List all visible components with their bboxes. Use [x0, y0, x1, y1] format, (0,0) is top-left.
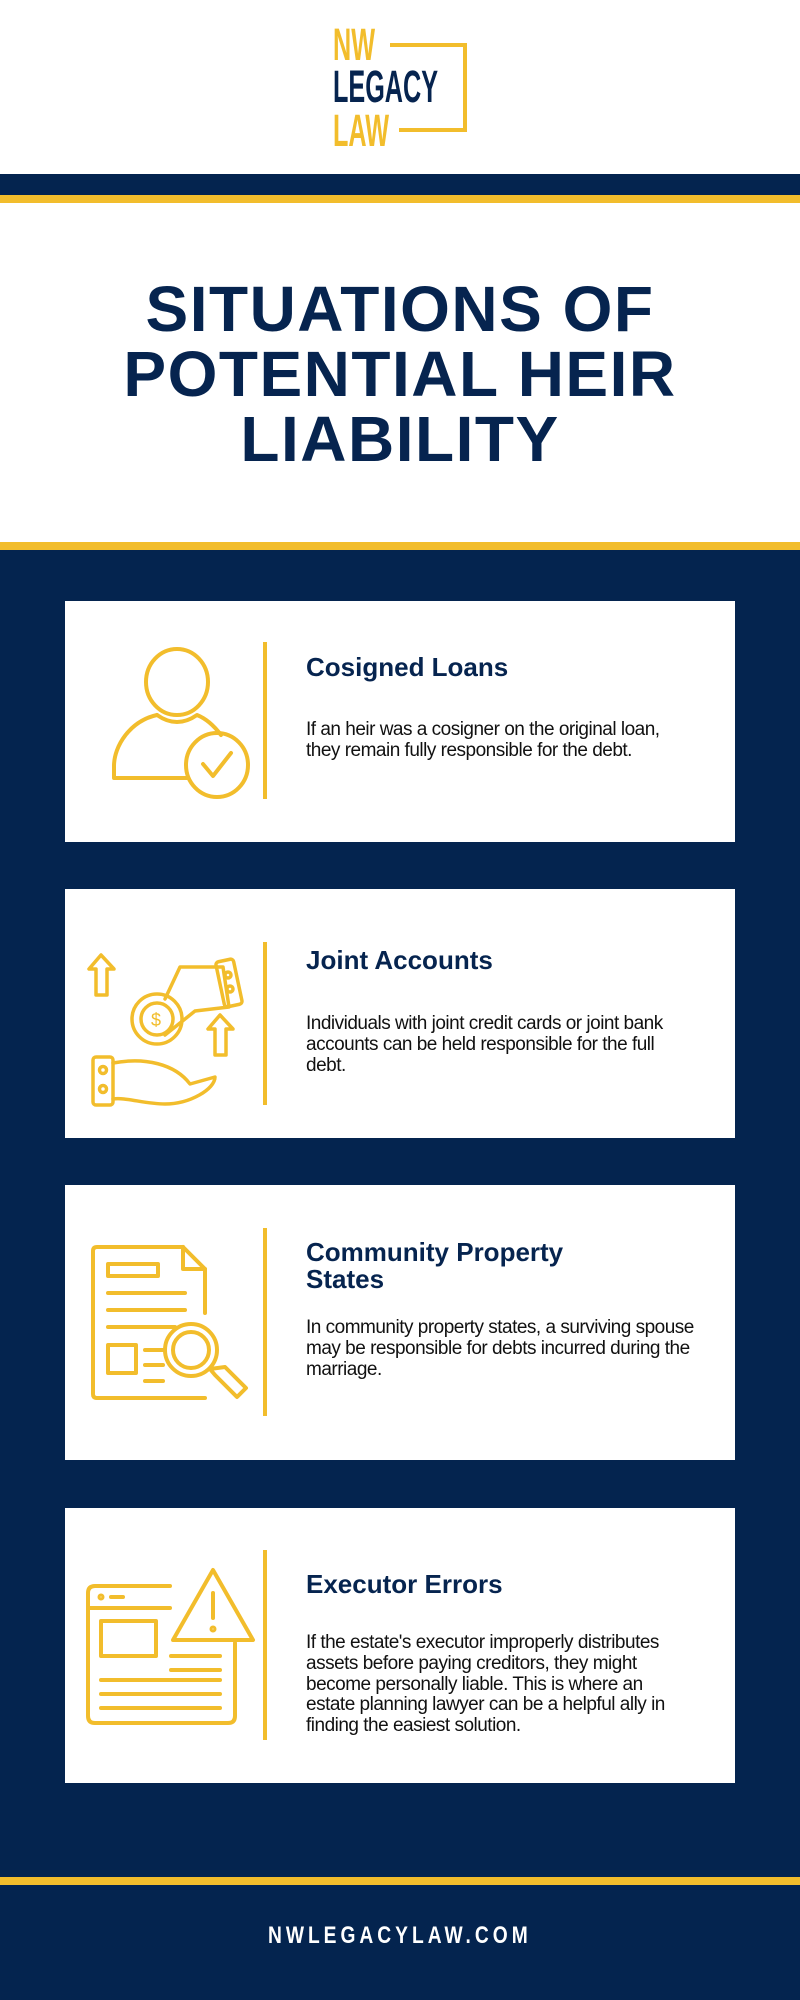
- logo bracket: [390, 43, 467, 132]
- text: In community property states, a surviving spouse may be responsible for debts incurred during the marriage.: [306, 1317, 694, 1380]
- heading: Executor Errors: [306, 1569, 503, 1599]
- text: Individuals with joint credit cards or joint bank accounts can be held responsible for the full debt.: [306, 1013, 663, 1076]
- icon: hands exchanging money: $: [151, 1010, 161, 1030]
- title: LIABILITY: [240, 403, 560, 475]
- text: estate planning lawyer can be a helpful ally in finding the easiest solution.: [306, 1694, 665, 1736]
- heading: Joint Accounts: [306, 945, 493, 975]
- icon: person with check: [112, 647, 250, 799]
- logo: NW: [333, 19, 375, 70]
- title: [123, 273, 677, 475]
- logo: LAW: [333, 105, 389, 156]
- icon: hands exchanging money: [87, 953, 244, 1107]
- panel: community property states: [65, 1185, 735, 1460]
- icon: document with magnifier: [91, 1244, 248, 1400]
- heading: Community Property: [306, 1237, 563, 1267]
- footer url: NWLEGACYLAW.COM: [268, 1922, 532, 1949]
- panel: executor errors: [65, 1508, 735, 1783]
- heading: States: [306, 1264, 384, 1294]
- heading: Cosigned Loans: [306, 652, 508, 682]
- text: If the estate's executor improperly distributes assets before paying creditors, they might become personally liable. This is where an: [306, 1632, 659, 1695]
- text: [306, 1632, 665, 1736]
- title: SITUATIONS OF: [146, 273, 654, 345]
- heading: [306, 1237, 563, 1294]
- logo: LEGACY: [333, 61, 438, 112]
- icon: browser window with warning: [86, 1568, 256, 1725]
- text: If an heir was a cosigner on the original loan, they remain fully responsible for the debt.: [306, 719, 660, 761]
- panel: joint accounts: [65, 889, 735, 1138]
- panel: cosigned loans: [65, 601, 735, 842]
- title: POTENTIAL HEIR: [123, 338, 677, 410]
- logo: [333, 19, 467, 156]
